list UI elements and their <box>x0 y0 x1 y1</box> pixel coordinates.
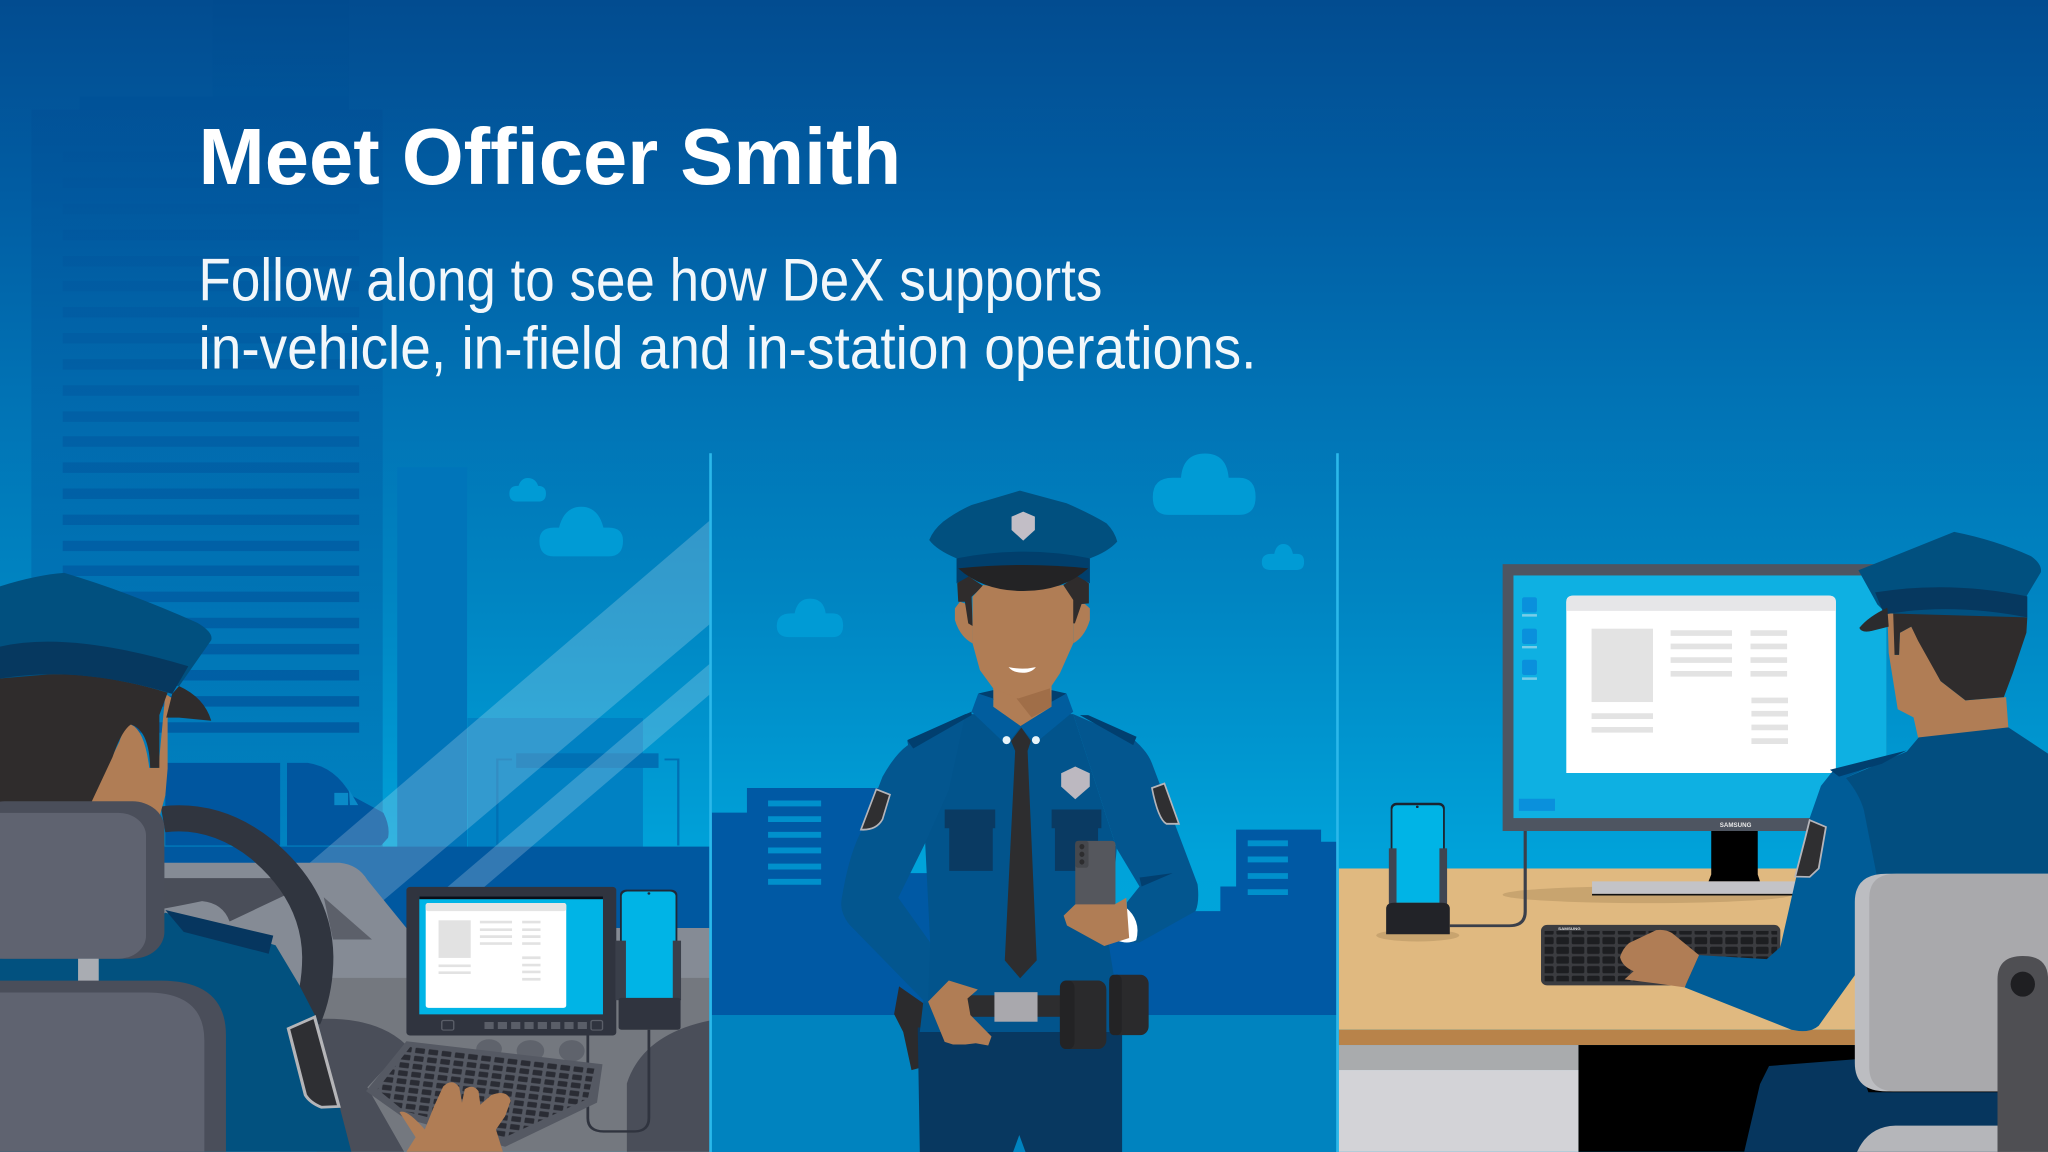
sleeve fold <box>1140 873 1173 887</box>
officer neck and ear <box>92 694 172 814</box>
officer smith standing <box>841 491 1198 1152</box>
subtitle: Follow along to see how DeX supports <box>199 246 1102 313</box>
sleeve patch <box>288 1017 339 1107</box>
collar pins <box>1003 736 1040 744</box>
dock cable <box>1450 831 1525 926</box>
street <box>164 846 710 928</box>
monitor brand: SAMSUNG <box>1720 822 1751 829</box>
holster <box>894 986 924 1070</box>
cap crown <box>0 573 212 686</box>
cap crown <box>1858 532 2041 617</box>
cap visor <box>958 565 1088 591</box>
docked phone with cradle <box>615 890 681 1030</box>
cap band <box>1875 587 2027 617</box>
steering wheel <box>163 818 318 1020</box>
drawer unit <box>1336 1045 1578 1152</box>
necktie <box>1005 728 1037 978</box>
charging cable <box>588 1030 649 1131</box>
smile <box>1009 667 1036 673</box>
ears <box>955 602 1090 643</box>
monitor <box>1503 564 1886 831</box>
shirt pockets <box>945 809 1101 871</box>
vent circles <box>476 1039 585 1062</box>
officer legs <box>1744 1059 2048 1152</box>
left arm <box>841 745 930 1000</box>
officer hair <box>0 674 168 803</box>
head close-up <box>907 491 1137 748</box>
phone held in hand <box>1075 841 1115 907</box>
panel: in-station scene <box>1336 532 2048 1152</box>
epaulette <box>1830 750 1907 777</box>
desk edge <box>1336 1030 1968 1045</box>
app window <box>1566 596 1836 773</box>
belt buckle <box>994 992 1038 1022</box>
collar back <box>978 690 1067 703</box>
cap crown <box>929 491 1117 558</box>
face <box>973 585 1073 698</box>
under-desk void <box>1578 1045 2048 1152</box>
windshield light beams <box>303 520 711 902</box>
officer jacket <box>0 913 351 1152</box>
hand on keyboard <box>400 1082 511 1152</box>
cap band <box>0 642 188 694</box>
phone hand <box>1064 898 1129 946</box>
dashboard shadow <box>324 897 372 940</box>
epaulettes <box>907 712 1137 748</box>
left panel clouds <box>509 478 623 556</box>
ground <box>712 1015 1338 1152</box>
monitor shadow <box>1503 886 1792 903</box>
delivery truck silhouette <box>165 763 389 845</box>
neck shadow <box>1017 687 1052 717</box>
subtitle: in-vehicle, in-field and in-station operations. <box>199 314 1256 381</box>
sleeve patch <box>1795 820 1826 877</box>
officer arm <box>1685 752 1904 1031</box>
skyline windows <box>768 801 1288 895</box>
desk keyboard: SAMSUNG <box>1558 927 1581 931</box>
shirt cuff <box>1117 907 1138 942</box>
console humps <box>317 1019 712 1152</box>
trousers <box>918 1028 1122 1152</box>
sleeve patches <box>861 784 1179 830</box>
officer hair <box>1893 609 2027 700</box>
monitor stand <box>1709 830 1760 881</box>
background city buildings <box>397 512 680 847</box>
phone on dock <box>1386 803 1450 934</box>
keyboard <box>366 1041 603 1147</box>
panel divider left <box>709 453 712 1152</box>
seat back <box>0 981 226 1152</box>
dashboard <box>163 863 712 1152</box>
officer body back <box>1846 727 2048 883</box>
background tower with window stripes <box>31 0 383 867</box>
lower dashboard <box>317 978 712 1152</box>
panel divider right <box>1336 453 1339 1152</box>
hand on keyboard <box>1620 930 1699 987</box>
chest badge <box>1061 767 1090 799</box>
chair post <box>1998 956 2048 1152</box>
clouds <box>777 454 1304 637</box>
belt hand <box>928 981 992 1045</box>
belt pouches <box>1060 975 1149 1049</box>
hair <box>957 575 1089 626</box>
cap badge <box>1012 512 1035 541</box>
cap visor <box>166 686 211 721</box>
shoulder epaulette <box>165 910 273 954</box>
seat headrest <box>0 801 164 959</box>
cap visor <box>1859 608 1889 632</box>
chair lower seat <box>1857 1126 2048 1152</box>
collar <box>972 693 1073 745</box>
desk keyboard <box>1541 925 1780 985</box>
officer neck and face side <box>1887 613 2008 737</box>
city skyline <box>712 788 1337 1015</box>
desk top <box>1336 868 1968 1030</box>
shirt torso <box>907 714 1123 1032</box>
neck <box>993 677 1052 726</box>
chair back <box>1855 874 2048 1091</box>
steering column <box>163 878 286 921</box>
monitor base <box>1592 881 1796 895</box>
icon labels <box>1522 614 1537 680</box>
panel: in-field scene <box>712 454 1338 1152</box>
dock shadow <box>1376 929 1459 941</box>
right arm <box>1073 714 1198 942</box>
panel: in-vehicle scene <box>0 467 712 1152</box>
laptop screen unit <box>406 887 616 1035</box>
cap band <box>957 552 1090 583</box>
desktop icons <box>1519 597 1555 811</box>
duty belt <box>967 995 1063 1017</box>
seat post <box>78 959 99 982</box>
title: Meet Officer Smith <box>199 112 901 201</box>
